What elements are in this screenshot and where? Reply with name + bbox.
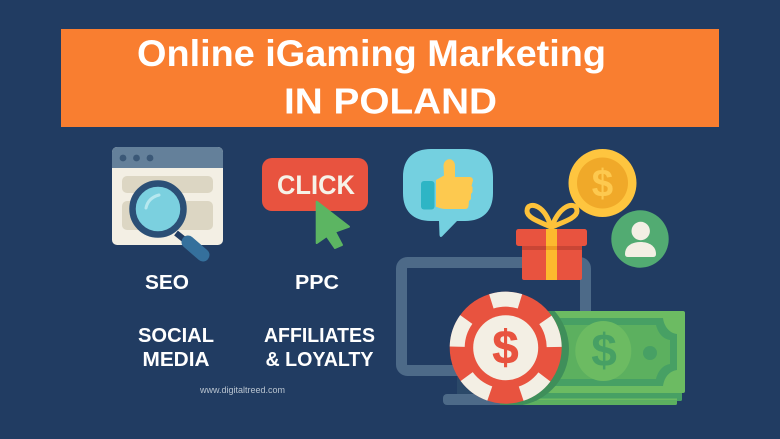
label: SEO: SEO (145, 272, 189, 294)
icon: browser with magnifying glass (SEO) (112, 147, 223, 255)
label: Affiliates and Loyalty: AFFILIATES (264, 325, 375, 347)
icon: gift box (516, 205, 587, 280)
icon: laptop outline (402, 262, 586, 405)
icon: gold dollar coin: $ (592, 162, 613, 206)
icon: gold dollar coin (568, 149, 636, 217)
poker chip shadow (500, 311, 569, 405)
icon: stack of green banknotes: $ (591, 324, 617, 376)
label: Social Media: SOCIAL (138, 325, 214, 347)
title banner (61, 29, 719, 127)
title banner: Online iGaming Marketing (137, 33, 606, 74)
website credit: www.digitaltreed.com (199, 385, 285, 395)
icon: red CLICK button with green cursor (PPC): CLICK (277, 170, 355, 200)
label: Social Media: MEDIA (142, 349, 210, 371)
label: Affiliates and Loyalty (264, 325, 375, 371)
icon: green user avatar (611, 210, 669, 268)
label: Affiliates and Loyalty: & LOYALTY (266, 349, 374, 371)
infographic canvas (61, 29, 719, 405)
icon: thumbs-up speech bubble (social media) (403, 149, 493, 237)
label: Social Media (138, 325, 214, 371)
icon: red poker chip with dollar sign (445, 287, 566, 408)
icon: red CLICK button with green cursor (PPC) (262, 158, 368, 248)
title banner: IN POLAND (284, 80, 497, 122)
icon: stack of green banknotes (500, 311, 685, 405)
label: PPC: PPC (295, 272, 339, 294)
icon: red poker chip with dollar sign: $ (492, 320, 519, 374)
